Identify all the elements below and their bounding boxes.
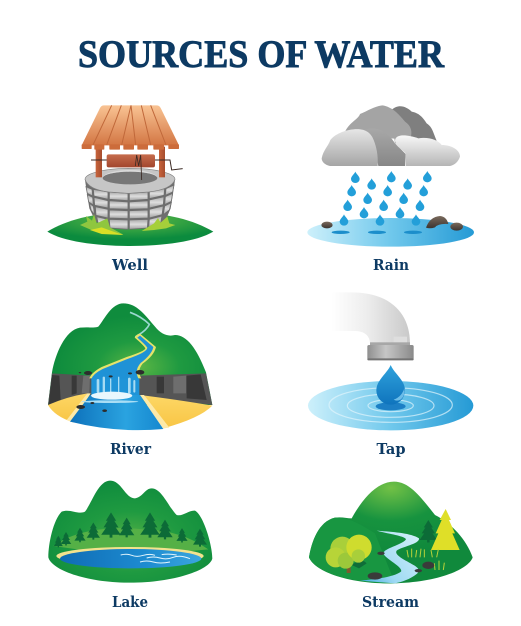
label: well: Well bbox=[111, 256, 148, 274]
panel: well bbox=[47, 105, 213, 274]
title: SOURCES OF WATER bbox=[78, 33, 445, 76]
panel: lake bbox=[48, 481, 212, 611]
stream water bbox=[360, 531, 419, 583]
panel: stream bbox=[309, 482, 473, 611]
panel: river bbox=[48, 303, 212, 458]
label: tap: Tap bbox=[376, 440, 406, 458]
label: lake: Lake bbox=[112, 593, 148, 611]
panel: rain bbox=[307, 105, 474, 274]
tree foliage bbox=[326, 535, 372, 569]
label: rain: Rain bbox=[373, 256, 409, 274]
tap illustration bbox=[308, 292, 473, 430]
stream illustration bbox=[309, 482, 473, 583]
rain illustration bbox=[307, 105, 474, 247]
river illustration bbox=[48, 303, 212, 430]
panel: tap bbox=[308, 292, 473, 458]
lake illustration bbox=[48, 481, 212, 583]
label: river: River bbox=[110, 440, 152, 458]
label: stream: Stream bbox=[362, 593, 419, 611]
well illustration bbox=[47, 105, 213, 246]
